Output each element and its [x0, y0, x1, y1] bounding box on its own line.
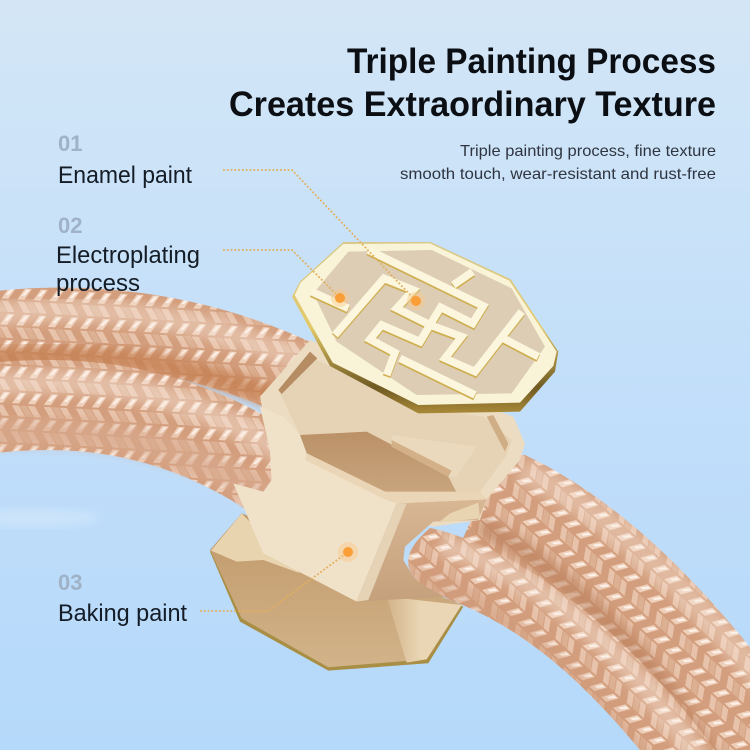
label 02 name — [56, 242, 200, 297]
lid: beige enamel panel — [313, 250, 545, 395]
cable: lower left — [0, 381, 290, 512]
lid: gold rim — [292, 242, 558, 413]
label 03 number: 03 — [58, 570, 82, 595]
clip body: right inner notch — [487, 415, 508, 452]
cable: upper left — [0, 310, 310, 414]
marker dot: enamel — [407, 292, 425, 310]
bottom plate of the clip — [210, 513, 463, 671]
leader line 3: baking paint — [200, 552, 348, 611]
label 02 name: Electroplating — [56, 242, 200, 269]
clip body: light corner — [438, 503, 480, 523]
cable: upper right — [460, 455, 750, 750]
gold lid plate with maze pattern — [292, 242, 558, 413]
subtitle: smooth touch, wear-resistant and rust-free — [400, 166, 716, 183]
marker dot: baking — [338, 542, 358, 562]
clip body: shadow strip on rear rim — [278, 352, 317, 394]
subtitle — [400, 143, 716, 183]
title — [229, 42, 716, 124]
leader line 2: electroplating process — [223, 250, 340, 298]
lid: cream frame — [295, 243, 557, 405]
clip body: rear walls and rim — [260, 340, 525, 527]
lid: maze gold shadows — [312, 252, 538, 397]
clip body: inner floor — [300, 432, 457, 494]
clip body: front rim — [305, 453, 487, 503]
clip body: facet transition — [357, 503, 407, 602]
label 01 name: Enamel paint — [58, 162, 192, 189]
clip body — [233, 340, 525, 602]
lid: maze cream lines — [312, 250, 538, 395]
title: Creates Extraordinary Texture — [229, 85, 716, 124]
label 01 number: 01 — [58, 131, 82, 156]
clip body: inner wall — [278, 358, 512, 497]
clip body: front left face — [233, 407, 397, 602]
subtitle: Triple painting process, fine texture — [460, 143, 716, 160]
clip body: front right face — [357, 499, 487, 602]
label 02 number: 02 — [58, 213, 82, 238]
clip body: inner tab — [392, 435, 477, 477]
title: Triple Painting Process — [347, 42, 716, 81]
leader line 1: enamel paint — [223, 170, 416, 301]
marker dot: electroplating — [331, 289, 349, 307]
label 03 name: Baking paint — [58, 600, 187, 627]
cable: lower right — [408, 528, 715, 750]
label 02 name: process — [56, 270, 140, 297]
